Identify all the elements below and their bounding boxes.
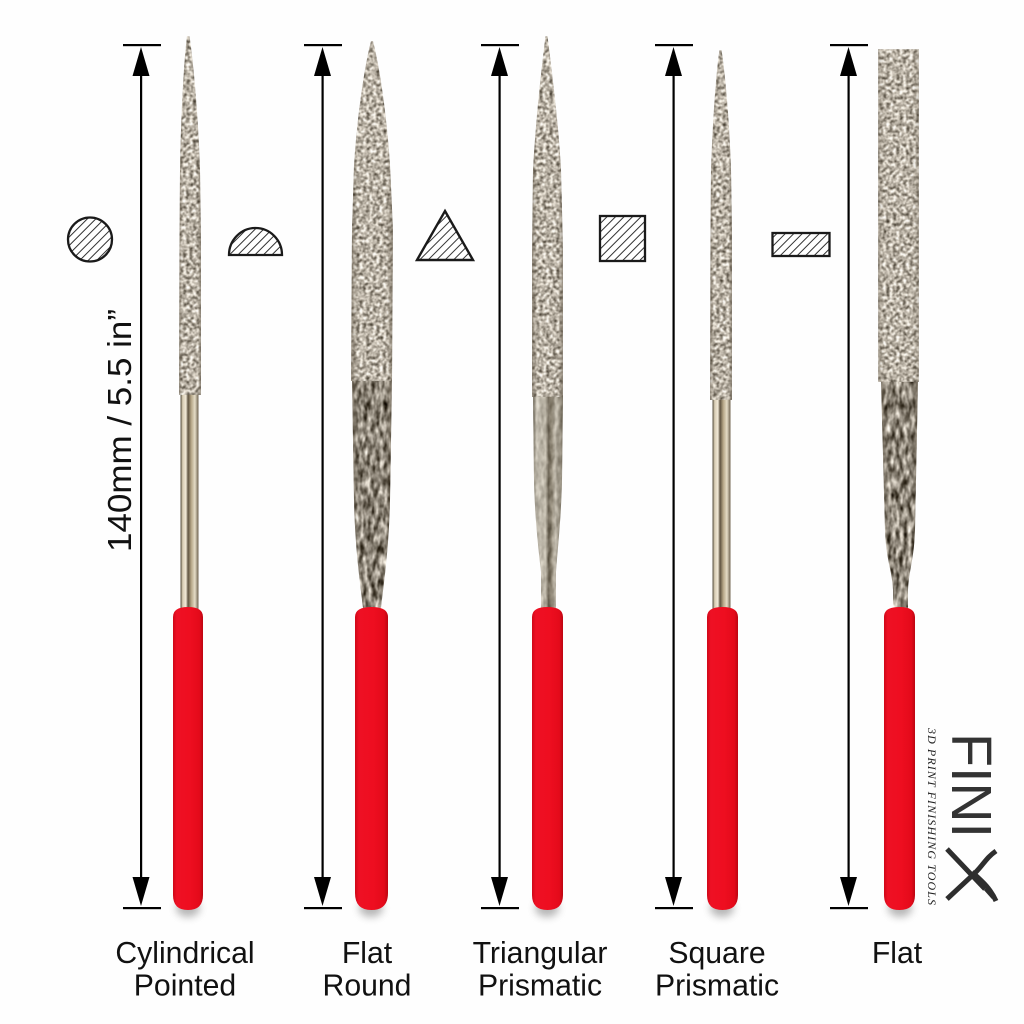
label: cylindrical pointed: Pointed xyxy=(134,970,236,1002)
dimension arrow 4 xyxy=(655,44,693,909)
file 3: triangular prismatic xyxy=(532,36,563,917)
dimension arrow 3 xyxy=(481,44,519,909)
dimension arrow 1 xyxy=(123,44,161,909)
dimension arrow 5 xyxy=(830,44,868,909)
label: flat round: Flat xyxy=(342,937,392,970)
label: flat: Flat xyxy=(872,937,923,970)
file 2: flat round xyxy=(351,41,393,917)
icon: circle cross-section xyxy=(68,218,112,262)
icon: square cross-section xyxy=(600,216,645,261)
icon: half-round cross-section xyxy=(229,228,282,255)
length label: 140mm / 5.5 in” xyxy=(102,309,139,552)
logo: Finix xyxy=(925,727,1003,905)
file 5: flat xyxy=(878,49,919,917)
label: square prismatic: Square xyxy=(668,937,766,970)
label: square prismatic: Prismatic xyxy=(655,970,779,1002)
dimension arrow 2 xyxy=(304,44,342,909)
label: cylindrical pointed: Cylindrical xyxy=(115,937,255,970)
logo X made of crossed tools xyxy=(947,849,996,901)
label: triangular prismatic: Prismatic xyxy=(478,970,602,1002)
logo tagline: 3D PRINT FINISHING TOOLS xyxy=(925,727,939,905)
file 1: cylindrical pointed xyxy=(173,36,203,917)
logo wordmark: FINI xyxy=(939,733,1003,838)
icon: triangle cross-section xyxy=(417,211,473,260)
label: flat round: Round xyxy=(323,970,411,1002)
file 4: square prismatic xyxy=(707,50,738,917)
icon: rectangle cross-section xyxy=(772,233,830,256)
label: triangular prismatic: Triangular xyxy=(473,937,607,970)
